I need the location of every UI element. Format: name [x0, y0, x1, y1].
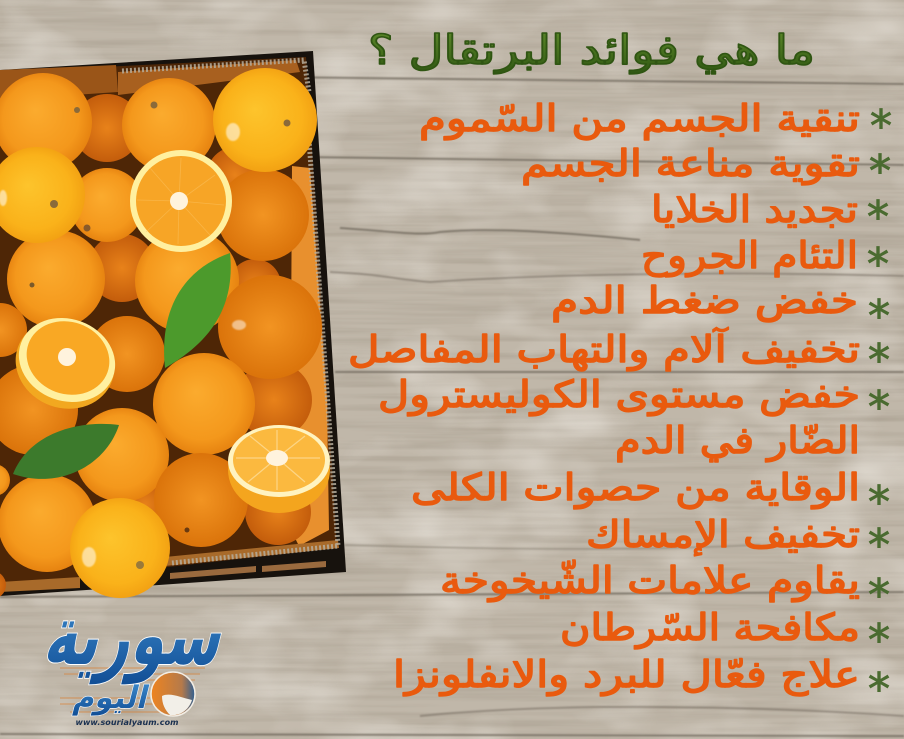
item 12: * [868, 664, 890, 715]
item 1: * [870, 101, 892, 152]
item 6 [348, 327, 890, 386]
item 4: * [867, 239, 889, 290]
item 12: علاج فعّال للبرد والانفلونزا [393, 653, 860, 696]
item 1 [419, 97, 892, 152]
logo url: www.sourialyaum.com [76, 718, 178, 727]
item 10: يقاوم علامات الشّيخوخة [440, 559, 860, 602]
item 7 [378, 373, 890, 433]
item 9 [586, 513, 890, 571]
item 2: * [869, 146, 891, 197]
orange half: right [228, 425, 330, 513]
crate box [0, 51, 346, 596]
logo speed lines [60, 668, 205, 712]
item 7: * [868, 382, 890, 433]
item 3 [651, 188, 889, 243]
item 3: * [867, 192, 889, 243]
item 5: خفض ضغط الدم [551, 279, 858, 322]
item 11 [560, 606, 890, 666]
green leaf: upper [164, 253, 231, 368]
item 6: تخفيف آلام والتهاب المفاصل [348, 327, 860, 371]
item 2: تقوية مناعة الجسم [521, 142, 860, 185]
item 5: * [868, 291, 890, 342]
item 11: * [868, 615, 890, 666]
whole oranges [0, 68, 322, 599]
item 6: * [868, 335, 890, 386]
orange half: top [130, 150, 232, 252]
item 1: تنقية الجسم من السّموم [419, 97, 860, 140]
logo wordmark: سورية [37, 587, 237, 684]
item 7: خفض مستوى الكوليسترول [378, 373, 860, 416]
item 3: تجديد الخلايا [651, 188, 858, 231]
item 8 [411, 466, 890, 528]
orange half: left [3, 305, 127, 422]
item 2 [521, 142, 891, 197]
item 7 continuation: الضّار في الدم [615, 419, 860, 462]
item 10 [440, 559, 890, 621]
orange stems and highlights [0, 102, 290, 569]
item 9: * [868, 520, 890, 571]
item 4: التئام الجروح [641, 234, 858, 277]
icon: globe [151, 672, 195, 716]
item 10: * [868, 570, 890, 621]
item 12 [393, 653, 890, 715]
back row dark oranges [73, 94, 312, 545]
item 4 [641, 234, 889, 290]
green leaf: lower [13, 424, 119, 479]
item 11: مكافحة السّرطان [560, 606, 860, 649]
orange crate photo [0, 51, 346, 599]
logo: Souria Al Youm [37, 587, 237, 727]
benefits list [348, 97, 892, 715]
item 8: * [868, 477, 890, 528]
item 9: تخفيف الإمساك [586, 513, 860, 556]
logo subtitle: اليوم [70, 679, 153, 715]
item 5 [551, 279, 890, 342]
item 8: الوقاية من حصوات الكلى [411, 466, 860, 509]
title: ما هي فوائد البرتقال ؟ [368, 26, 815, 75]
